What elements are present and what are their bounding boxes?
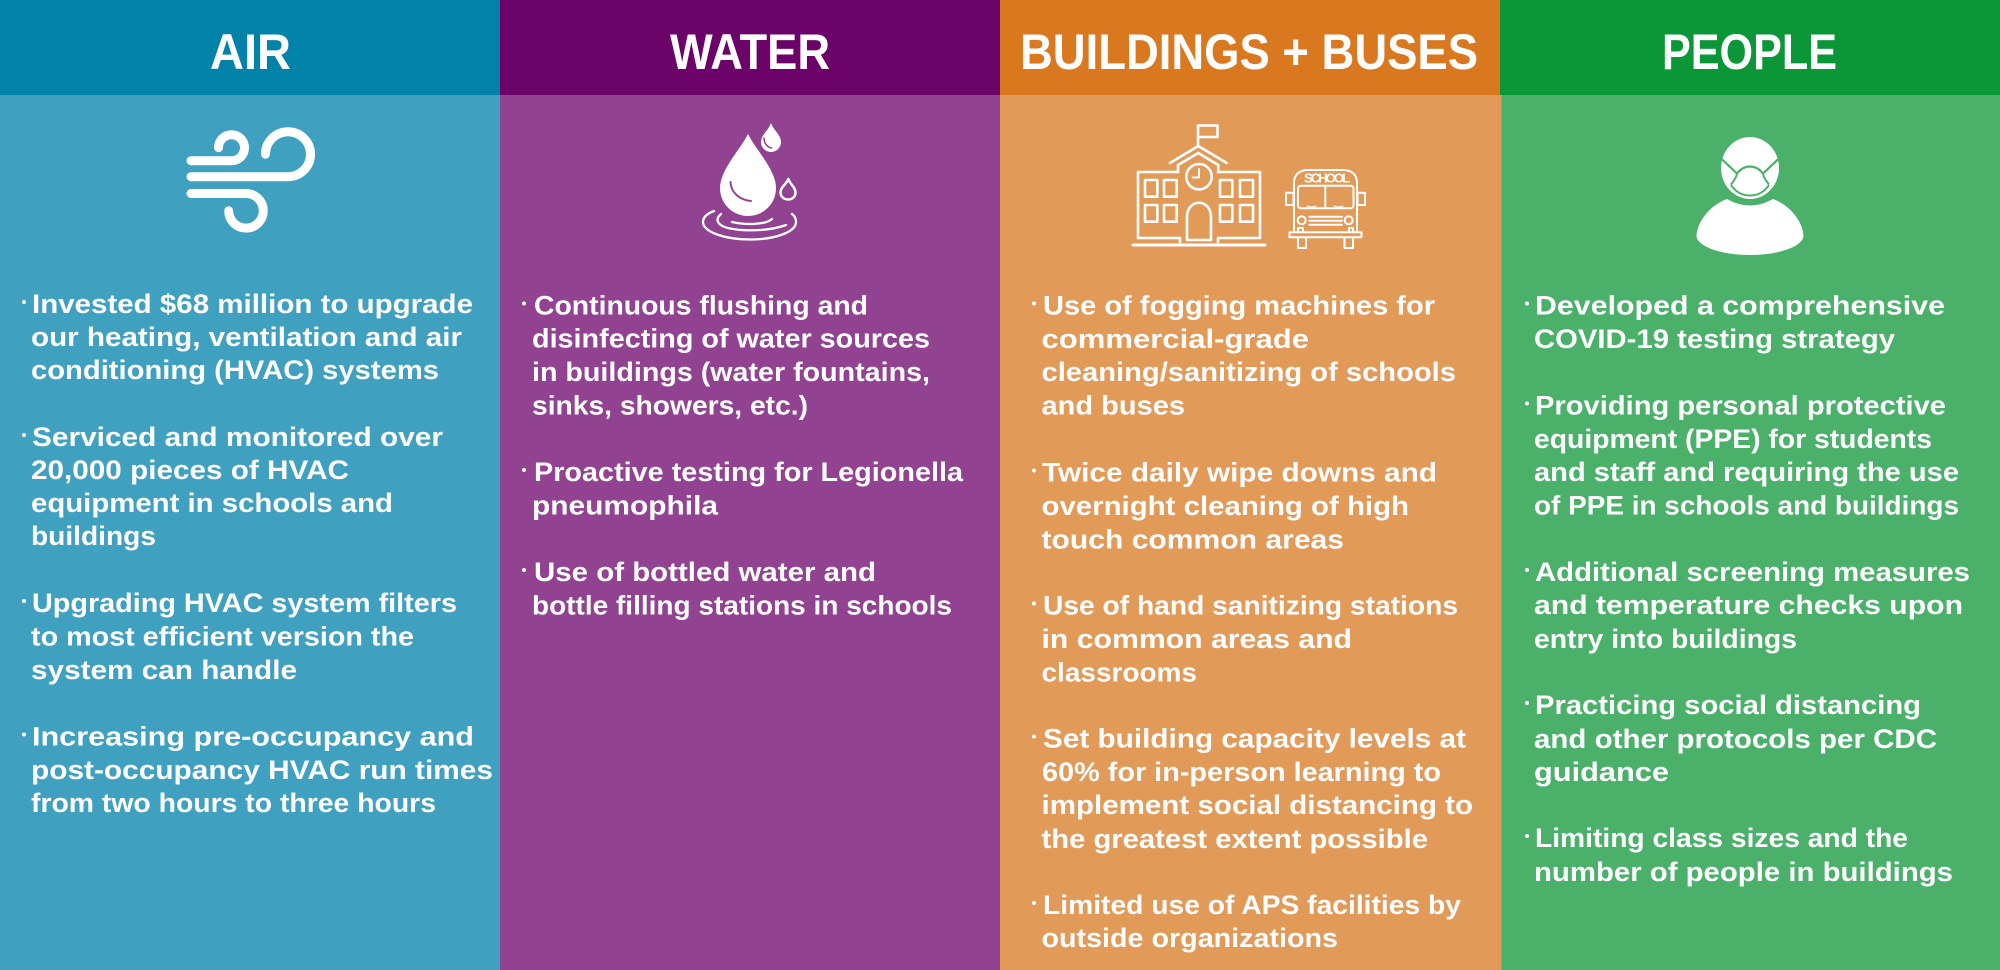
bullet: hand sanitizing: in common areas and [1042,624,1352,654]
bullet: limited use: outside organizations [1042,923,1338,953]
bullet: class sizes: Limiting class sizes and the [1535,823,1908,853]
bullet: legionella testing [522,457,963,520]
icon: school building [1133,126,1265,245]
bullet: testing strategy: Developed a comprehensive [1535,290,1945,320]
bullet: wipe downs: touch common areas [1042,524,1344,554]
bullet: PPE: and staff and requiring the use [1534,457,1959,487]
bullet: limited use [1032,890,1461,953]
panel: buildings and buses [1000,0,1500,970]
bullet: PPE: Providing personal protective [1535,391,1946,421]
heading: people: PEOPLE [1662,24,1837,80]
bullet: legionella testing: pneumophila [532,490,718,520]
bullet: run times [22,722,493,818]
bullet: building capacity: implement social distancing to [1042,790,1473,820]
bullet: screening: entry into buildings [1534,624,1797,654]
bullet: bottled water [522,557,952,620]
icon: person with mask [1696,137,1804,255]
bullet: hand sanitizing: Use of hand sanitizing stations [1043,590,1458,620]
bullet: HVAC investment: our heating, ventilation and air [31,322,462,352]
bullet: social distancing [1525,690,1937,787]
bullet: equipment serviced: Serviced and monitored over [32,422,443,452]
bullet: screening [1525,557,1970,654]
bullet: building capacity [1032,723,1473,854]
panel: air [0,0,500,970]
bullet: hand sanitizing [1032,590,1458,687]
bullet: flushing: disinfecting of water sources [532,324,930,354]
icon: water drops [703,123,796,240]
bullet: hand sanitizing: classrooms [1042,657,1197,687]
bullet: flushing: in buildings (water fountains, [532,357,930,387]
bullet: equipment serviced: 20,000 pieces of HVAC [31,455,349,485]
bullet: limited use: Limited use of APS facilities by [1043,890,1461,920]
bullet: building capacity: 60% for in-person learning to [1042,757,1441,787]
bullet: legionella testing: Proactive testing for Legionella [534,457,963,487]
heading: buildings + buses: BUILDINGS + BUSES [1020,24,1478,80]
bullet: testing strategy [1525,290,1945,354]
bullet: building capacity: the greatest extent possible [1042,824,1428,854]
bullet: fogging machines: and buses [1042,391,1185,421]
bullet: filters [22,588,457,685]
bullet: class sizes [1525,823,1953,887]
bullet: bottled water: Use of bottled water and [534,557,876,587]
bullet: wipe downs: Twice daily wipe downs and [1042,458,1437,488]
bullet: wipe downs: overnight cleaning of high [1042,491,1409,521]
bullet: HVAC investment: Invested $68 million to upgrade [32,289,473,319]
bullet: equipment serviced: buildings [31,521,156,551]
bullet: fogging machines [1032,290,1456,421]
bullet: class sizes: number of people in buildings [1534,857,1953,887]
bullet: equipment serviced [22,422,443,551]
bullet: testing strategy: COVID-19 testing strategy [1534,324,1895,354]
bullet: screening: Additional screening measures [1535,557,1970,587]
heading: air: AIR [210,24,291,80]
bullet: wipe downs [1032,458,1437,554]
bullet: filters: system can handle [31,655,297,685]
bullet: equipment serviced: equipment in schools and [31,488,393,518]
bullet: fogging machines: commercial-grade [1042,324,1309,354]
bullet: fogging machines: cleaning/sanitizing of schools [1042,357,1456,387]
bullet: run times: from two hours to three hours [31,788,436,818]
bullet: social distancing: Practicing social distancing [1535,690,1921,720]
bullet: HVAC investment [22,289,473,385]
bullet: bottled water: bottle filling stations in schools [532,590,952,620]
panel: water [500,0,1000,970]
bullet: run times: post-occupancy HVAC run times [31,755,493,785]
panel: people [1500,0,2000,970]
bullet: fogging machines: Use of fogging machines for [1043,290,1435,320]
icon: wind [191,132,310,228]
icon: school bus [1286,170,1365,248]
bullet: screening: and temperature checks upon [1534,590,1963,620]
bullet: run times: Increasing pre-occupancy and [32,722,474,752]
bullet: PPE: of PPE in schools and buildings [1534,491,1959,521]
icon: school bus: SCHOOL [1304,170,1350,186]
bullet: flushing: sinks, showers, etc.) [532,390,808,420]
bullet: building capacity: Set building capacity levels at [1043,723,1466,753]
bullet: flushing: Continuous flushing and [534,290,868,320]
bullet: PPE [1525,391,1959,521]
heading: water: WATER [670,24,830,80]
bullet: filters: Upgrading HVAC system filters [32,588,457,618]
bullet: social distancing: and other protocols per CDC [1534,724,1937,754]
bullet: flushing [522,290,930,420]
bullet: social distancing: guidance [1534,757,1669,787]
bullet: filters: to most efficient version the [31,622,414,652]
bullet: PPE: equipment (PPE) for students [1534,424,1932,454]
bullet: HVAC investment: conditioning (HVAC) systems [31,355,439,385]
